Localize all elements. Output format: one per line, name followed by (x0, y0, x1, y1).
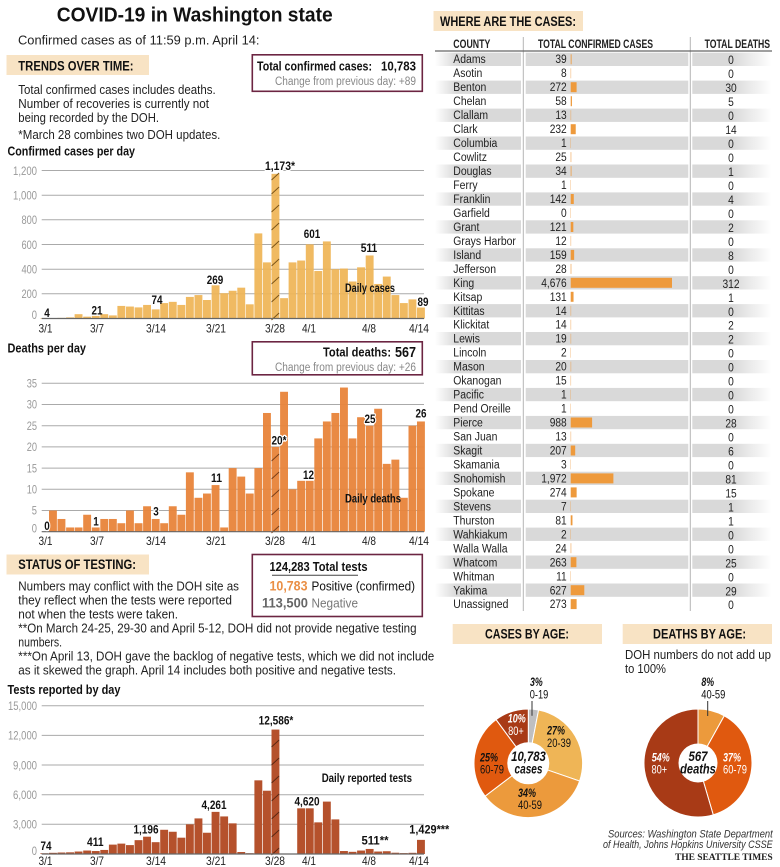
bar chart: tests reported by day: Daily reported tests (322, 771, 412, 785)
bar chart: confirmed cases per day: 4 (44, 306, 50, 320)
county names: Kittitas (453, 305, 485, 318)
table header (453, 39, 770, 51)
case counts: 58 (555, 95, 567, 108)
county names: Grays Harbor (453, 235, 516, 248)
case counts: 15 (555, 375, 567, 388)
sources (603, 829, 774, 851)
bar chart: tests reported by day: 3,000 (13, 820, 37, 832)
county names: Cowlitz (453, 151, 487, 164)
death counts: 2 (728, 222, 734, 235)
bar chart: confirmed cases per day: Daily cases (345, 281, 395, 295)
callout: testing totals: Negative (312, 597, 358, 611)
case counts: 2 (561, 347, 567, 360)
death counts: 0 (728, 376, 734, 389)
case counts: 8 (561, 67, 567, 80)
bar chart: deaths per day: 30 (27, 400, 37, 412)
bar chart: deaths per day: 20* (272, 433, 287, 447)
donut chart: cases by age (474, 675, 583, 818)
donut chart: cases by age: 0-19 (530, 687, 548, 701)
bar chart: confirmed cases per day: 3/14 (146, 322, 166, 336)
death counts: 0 (728, 530, 734, 543)
case counts: 131 (550, 291, 567, 304)
death counts: 0 (728, 544, 734, 557)
callout: testing totals (252, 554, 422, 616)
heading: trends over time (6, 55, 149, 75)
heading: status of testing: STATUS OF TESTING: (18, 557, 136, 572)
bar chart: tests reported by day: 0 (32, 846, 37, 858)
bar chart: confirmed cases per day: 3/7 (90, 322, 104, 336)
donut chart: cases by age: 34% (518, 786, 536, 800)
case counts: 4,676 (541, 277, 567, 290)
donut chart: cases by age: 3% (530, 675, 543, 689)
case counts: 263 (550, 557, 567, 570)
callout: total confirmed cases (252, 55, 422, 91)
bar chart: confirmed cases per day: 511 (361, 241, 378, 255)
death counts: 25 (725, 558, 737, 571)
bar chart: confirmed cases per day: 3/21 (206, 322, 226, 336)
death counts: 15 (725, 488, 737, 501)
case counts: 34 (555, 165, 567, 178)
bar chart: confirmed cases per day (13, 159, 429, 336)
text block: testing notes: **On March 24-25, 29-30 and April 5-12, DOH did not provide negative testing (18, 622, 417, 636)
death counts: 0 (728, 110, 734, 123)
donut chart: deaths by age: 37% (723, 751, 741, 765)
county names: King (453, 277, 474, 290)
callout: total confirmed cases: Total confirmed cases: (257, 60, 372, 74)
text block: trends notes (18, 83, 220, 142)
death counts: 0 (728, 460, 734, 473)
bar chart: tests reported by day: 411 (87, 835, 104, 849)
bar chart: deaths per day: 5 (32, 506, 37, 518)
credit: The Seattle Times: THE SEATTLE TIMES (675, 853, 773, 863)
heading: deaths per day: Deaths per day (8, 342, 86, 356)
death counts: 6 (728, 446, 734, 459)
death counts: 0 (728, 348, 734, 361)
text block: trends notes: Total confirmed cases includes deaths. (18, 83, 216, 97)
heading: cases by age: CASES BY AGE: (485, 626, 569, 642)
bar chart: deaths per day: 3/21 (206, 534, 226, 548)
bar chart: tests reported by day: 15,000 (8, 701, 37, 713)
donut chart: deaths by age (644, 675, 752, 817)
death counts: 0 (728, 404, 734, 417)
bar chart: deaths per day: 1 (93, 515, 99, 529)
county bars (571, 54, 672, 609)
case counts: 24 (555, 543, 567, 556)
case counts: 207 (550, 445, 567, 458)
donut chart: cases by age: 20-39 (547, 736, 571, 750)
county names: Garfield (453, 207, 490, 220)
donut chart: cases by age: 40-59 (518, 798, 542, 812)
text block: testing notes: ***On April 13, DOH gave the backlog of negative tests, which we did not include (18, 650, 434, 664)
death counts: 4 (728, 194, 734, 207)
bar chart: deaths per day: 3/14 (146, 534, 166, 548)
bar chart: confirmed cases per day: 4/14 (409, 322, 429, 336)
bar chart: confirmed cases per day: 4/8 (362, 322, 376, 336)
donut chart: cases by age: cases (514, 761, 543, 776)
table stripes (435, 53, 772, 597)
bar chart: deaths per day: 25 (27, 421, 37, 433)
heading: confirmed cases per day: Confirmed cases per day (8, 144, 135, 158)
case counts: 272 (550, 81, 567, 94)
donut chart: deaths by age: deaths (680, 761, 716, 776)
death counts: 0 (728, 362, 734, 375)
bar chart: deaths per day: 0 (44, 519, 50, 533)
case counts: 14 (555, 319, 567, 332)
death counts: 0 (728, 208, 734, 221)
callout: testing totals: 124,283 Total tests (270, 560, 368, 574)
case counts: 7 (561, 501, 567, 514)
case counts: 3 (561, 459, 567, 472)
bar chart: deaths per day: 4/8 (362, 534, 376, 548)
heading: where are the cases: WHERE ARE THE CASES: (440, 14, 576, 29)
county names: Clallam (453, 109, 488, 122)
bar chart: deaths per day: 20 (27, 442, 37, 454)
death counts: 29 (725, 586, 737, 599)
bar chart: confirmed cases per day: 400 (22, 264, 37, 276)
case counts: 121 (550, 221, 567, 234)
case counts: 232 (550, 123, 567, 136)
bar chart: deaths per day: 15 (27, 463, 37, 475)
county names: Pend Oreille (453, 403, 511, 416)
death counts: 2 (728, 334, 734, 347)
county names: Thurston (453, 515, 494, 528)
donut chart: deaths by age: 567 (688, 749, 709, 764)
death counts: 1 (728, 292, 734, 305)
case counts: 1 (561, 137, 567, 150)
case counts: 627 (550, 585, 567, 598)
death counts: 8 (728, 250, 734, 263)
county names: Skamania (453, 459, 500, 472)
death counts: 1 (728, 516, 734, 529)
county names: Ferry (453, 179, 478, 192)
bar chart: tests reported by day: 4,620 (294, 794, 320, 808)
case counts: 1 (561, 179, 567, 192)
case counts: 0 (561, 207, 567, 220)
death counts: 0 (728, 138, 734, 151)
donut chart: cases by age: 10,783 (511, 749, 546, 764)
bar chart: confirmed cases per day: 1,200 (13, 166, 37, 178)
death counts: 5 (728, 96, 734, 109)
county names: Adams (453, 53, 486, 66)
bar chart: deaths per day: 12 (303, 468, 314, 482)
case counts: 39 (555, 53, 567, 66)
heading: where are the cases (434, 11, 583, 31)
bar chart: deaths per day: 35 (27, 378, 37, 390)
bar chart: tests reported by day: 12,586* (259, 714, 294, 728)
case counts: 11 (556, 571, 567, 584)
case counts: 274 (550, 487, 567, 500)
death counts: 0 (728, 390, 734, 403)
bar chart: tests reported by day: 4,261 (202, 798, 227, 812)
bar chart: confirmed cases per day: 600 (22, 240, 37, 252)
heading: deaths by age: DEATHS BY AGE: (653, 626, 746, 642)
county names: Okanogan (453, 375, 501, 388)
case counts: 1 (561, 389, 567, 402)
bar chart: tests reported by day: 1,196 (134, 822, 159, 836)
bar chart: confirmed cases per day: 4/1 (302, 322, 316, 336)
case counts: 142 (550, 193, 567, 206)
donut chart: deaths by age: 80+ (651, 762, 667, 776)
text block: trends notes: Number of recoveries is currently not (18, 97, 209, 111)
case counts: 1,972 (541, 473, 567, 486)
case counts: 20 (555, 361, 567, 374)
text block: testing notes: as it skewed the graph. April 14 includes both positive and negative tests. (18, 664, 396, 678)
case counts: 12 (555, 235, 567, 248)
county names: Spokane (453, 487, 494, 500)
county names: Wahkiakum (453, 529, 507, 542)
bar chart: tests reported by day: 6,000 (13, 790, 37, 802)
death counts: 30 (725, 82, 737, 95)
bar chart: deaths per day: 26 (416, 407, 427, 421)
death counts: 0 (728, 68, 734, 81)
bar chart: confirmed cases per day: 3/1 (38, 322, 53, 336)
callout: total confirmed cases: 10,783 (381, 60, 416, 74)
county names: Whitman (453, 571, 494, 584)
table header: TOTAL CONFIRMED CASES (538, 39, 653, 51)
heading: trends over time: TRENDS OVER TIME: (18, 58, 133, 74)
bar chart: deaths per day: 3/7 (90, 534, 104, 548)
case counts: 2 (561, 529, 567, 542)
bar chart: deaths per day: 4/1 (302, 534, 316, 548)
donut chart: deaths by age: 8% (701, 675, 714, 689)
heading: cases by age (453, 624, 602, 644)
case counts: 1 (561, 403, 567, 416)
death counts: 28 (725, 418, 737, 431)
death counts: 81 (725, 474, 737, 487)
county names: Stevens (453, 501, 491, 514)
text block: trends notes: being recorded by the DOH. (18, 111, 159, 125)
bar chart: confirmed cases per day: 74 (152, 293, 163, 307)
county names: San Juan (453, 431, 497, 444)
bar chart: confirmed cases per day: 1,173* (265, 159, 295, 173)
callout: total deaths (252, 342, 422, 375)
county names: Unassigned (453, 598, 508, 611)
county names: Grant (453, 221, 480, 234)
county names: Klickitat (453, 319, 490, 332)
donut chart: deaths by age: 60-79 (723, 762, 747, 776)
table: county cases and deaths (435, 37, 772, 612)
county names: Clark (453, 123, 478, 136)
case counts: 25 (555, 151, 567, 164)
death counts: 0 (728, 432, 734, 445)
case counts (541, 53, 567, 611)
county names: Franklin (453, 193, 490, 206)
case counts: 14 (555, 305, 567, 318)
case counts: 273 (550, 598, 567, 611)
donut chart: deaths by age: 54% (652, 751, 670, 765)
text block: testing notes: they reflect when the tests were reported (18, 594, 232, 608)
county names: Island (453, 249, 481, 262)
bar chart: confirmed cases per day: 800 (22, 215, 37, 227)
bar chart: tests reported by day: 74 (40, 839, 52, 853)
bar chart: deaths per day: 10 (27, 484, 37, 496)
callout: testing totals: 10,783 (270, 579, 308, 594)
callout: total deaths: Total deaths: (323, 346, 391, 360)
heading: status of testing (6, 554, 149, 574)
county names: Asotin (453, 67, 482, 80)
bar chart: tests reported by day: 9,000 (13, 760, 37, 772)
death counts: 1 (728, 166, 734, 179)
bar chart: deaths per day: 3 (153, 505, 159, 519)
bar chart: confirmed cases per day: 200 (22, 289, 37, 301)
subtitle: Confirmed cases as of 11:59 p.m. April 14: (18, 32, 260, 47)
county names: Kitsap (453, 291, 482, 304)
callout: total deaths: 567 (395, 345, 416, 361)
county names: Pierce (453, 417, 483, 430)
donut chart: cases by age: 60-79 (480, 762, 504, 776)
death counts: 0 (728, 236, 734, 249)
callout: total confirmed cases: Change from previous day: +89 (275, 76, 416, 88)
bar chart: deaths per day: 3/28 (265, 534, 285, 548)
case counts: 81 (555, 515, 567, 528)
death counts: 14 (725, 124, 737, 137)
death counts: 0 (728, 152, 734, 165)
county names: Lincoln (453, 347, 486, 360)
county names: Walla Walla (453, 543, 508, 556)
donut chart: deaths by age: 40-59 (701, 687, 726, 701)
donut chart: cases by age: 10% (508, 711, 526, 725)
bar chart: confirmed cases per day: 89 (418, 295, 429, 309)
text block: trends notes: *March 28 combines two DOH updates. (18, 128, 220, 142)
death counts (722, 54, 740, 612)
county names: Mason (453, 361, 485, 374)
bar chart: confirmed cases per day: 1,000 (13, 190, 37, 202)
title: COVID-19 in Washington state (57, 4, 333, 27)
heading: deaths by age (623, 624, 772, 644)
text block: testing notes: Numbers may conflict with the DOH site as (18, 580, 239, 594)
county names (453, 53, 516, 611)
case counts: 13 (555, 109, 567, 122)
bar chart: confirmed cases per day: 3/28 (265, 322, 285, 336)
county names: Lewis (453, 333, 480, 346)
case counts: 13 (555, 431, 567, 444)
county names: Columbia (453, 137, 498, 150)
bar chart: confirmed cases per day: 601 (304, 227, 321, 241)
death counts: 1 (728, 502, 734, 515)
callout: testing totals: Positive (confirmed) (312, 580, 415, 594)
death counts: 312 (722, 278, 740, 291)
bar chart: deaths per day: 11 (211, 471, 222, 485)
county names: Whatcom (453, 557, 497, 570)
bar chart: deaths per day: 25 (364, 412, 376, 426)
donut chart: cases by age: 27% (546, 723, 565, 737)
death counts: 0 (728, 599, 734, 612)
bar chart: confirmed cases per day: 21 (92, 304, 103, 318)
death counts: 0 (728, 54, 734, 67)
text block: testing notes: not when the tests were taken. (18, 608, 178, 622)
case counts: 28 (555, 263, 567, 276)
death counts: 0 (728, 264, 734, 277)
bar chart: confirmed cases per day: 0 (32, 310, 37, 322)
death counts: 2 (728, 320, 734, 333)
bar chart: tests reported by day: 12,000 (8, 731, 37, 743)
death counts: 0 (728, 180, 734, 193)
text block: deaths by age note (625, 648, 771, 676)
county names: Skagit (453, 445, 483, 458)
county names: Snohomish (453, 473, 505, 486)
bar chart: deaths per day (27, 378, 429, 548)
table header: COUNTY (453, 39, 491, 51)
county names: Benton (453, 81, 486, 94)
callout: total deaths: Change from previous day: +26 (275, 362, 416, 374)
county names: Pacific (453, 389, 484, 402)
case counts: 988 (550, 417, 567, 430)
donut chart: cases by age: 80+ (508, 724, 524, 738)
county names: Chelan (453, 95, 486, 108)
county names: Jefferson (453, 263, 496, 276)
death counts: 0 (728, 572, 734, 585)
county names: Yakima (453, 585, 488, 598)
bar chart: deaths per day: 0 (32, 524, 37, 536)
bar chart: deaths per day: Daily deaths (345, 492, 401, 506)
county names: Douglas (453, 165, 492, 178)
case counts: 159 (550, 249, 567, 262)
text block: testing notes (18, 580, 434, 678)
text block: deaths by age note: to 100% (625, 662, 666, 676)
donut chart: cases by age: 25% (479, 751, 498, 765)
bar chart: tests reported by day (8, 701, 450, 867)
bar chart: deaths per day: 3/1 (38, 534, 53, 548)
death counts: 0 (728, 306, 734, 319)
bar chart: confirmed cases per day: 269 (207, 273, 224, 287)
heading: tests reported by day: Tests reported by day (8, 683, 121, 697)
bar chart: tests reported by day: 1,429*** (409, 822, 450, 836)
case counts: 19 (555, 333, 567, 346)
callout: testing totals: 113,500 (262, 596, 308, 611)
bar chart: deaths per day: 4/14 (409, 534, 429, 548)
text block: testing notes: numbers. (18, 636, 62, 650)
bar chart: tests reported by day: 511** (362, 834, 389, 848)
